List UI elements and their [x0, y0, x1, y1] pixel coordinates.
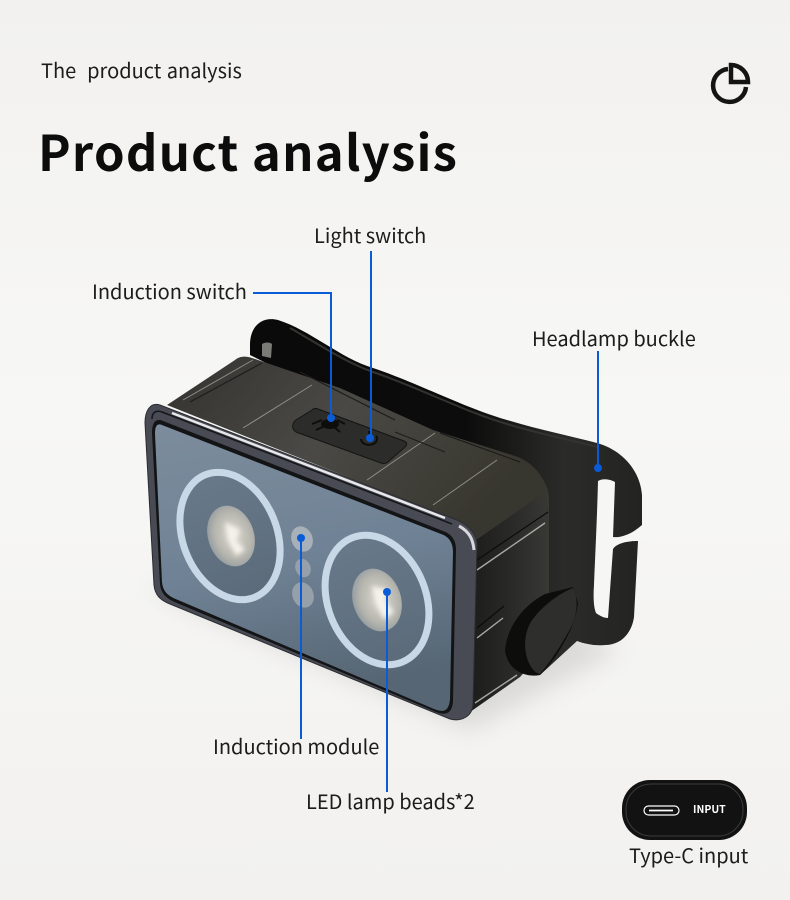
bezel	[145, 404, 477, 720]
left LED ring	[162, 457, 298, 615]
label: headlamp buckle: Headlamp buckle	[532, 323, 696, 352]
label: light switch: Light switch	[314, 220, 426, 249]
Type-C input badge	[622, 780, 747, 840]
label: LED lamp beads: LED lamp beads*2	[306, 786, 475, 815]
callout lines	[253, 251, 598, 792]
lamp body	[167, 357, 549, 712]
icon: power	[361, 431, 377, 445]
right LED highlights	[372, 586, 394, 620]
left LED highlights	[225, 522, 245, 556]
inner frame	[152, 420, 456, 714]
icon: pie chart	[713, 65, 748, 102]
icon: induction hand	[312, 419, 345, 432]
top of body	[167, 357, 548, 540]
induction module dots	[287, 523, 318, 611]
right LED ring	[306, 520, 448, 680]
label: Type-C input: Type-C input	[629, 840, 748, 869]
ground shadow	[150, 560, 620, 730]
front face	[145, 404, 477, 720]
side of body	[450, 465, 549, 712]
button panel	[293, 408, 407, 463]
callout dots	[297, 414, 602, 596]
subtitle: The product analysis	[41, 55, 242, 84]
knob	[505, 587, 578, 676]
buckle slot	[594, 479, 645, 618]
title: Product analysis	[38, 115, 458, 186]
buckle end slot	[262, 342, 272, 358]
badge text: INPUT: INPUT	[693, 802, 726, 817]
left LED lens	[200, 499, 262, 573]
face glass	[155, 424, 453, 711]
strap edge highlight	[290, 328, 597, 447]
headlamp buckle	[250, 319, 645, 675]
label: induction module: Induction module	[213, 731, 379, 760]
label: induction switch: Induction switch	[92, 276, 247, 305]
right LED lens	[344, 562, 410, 638]
